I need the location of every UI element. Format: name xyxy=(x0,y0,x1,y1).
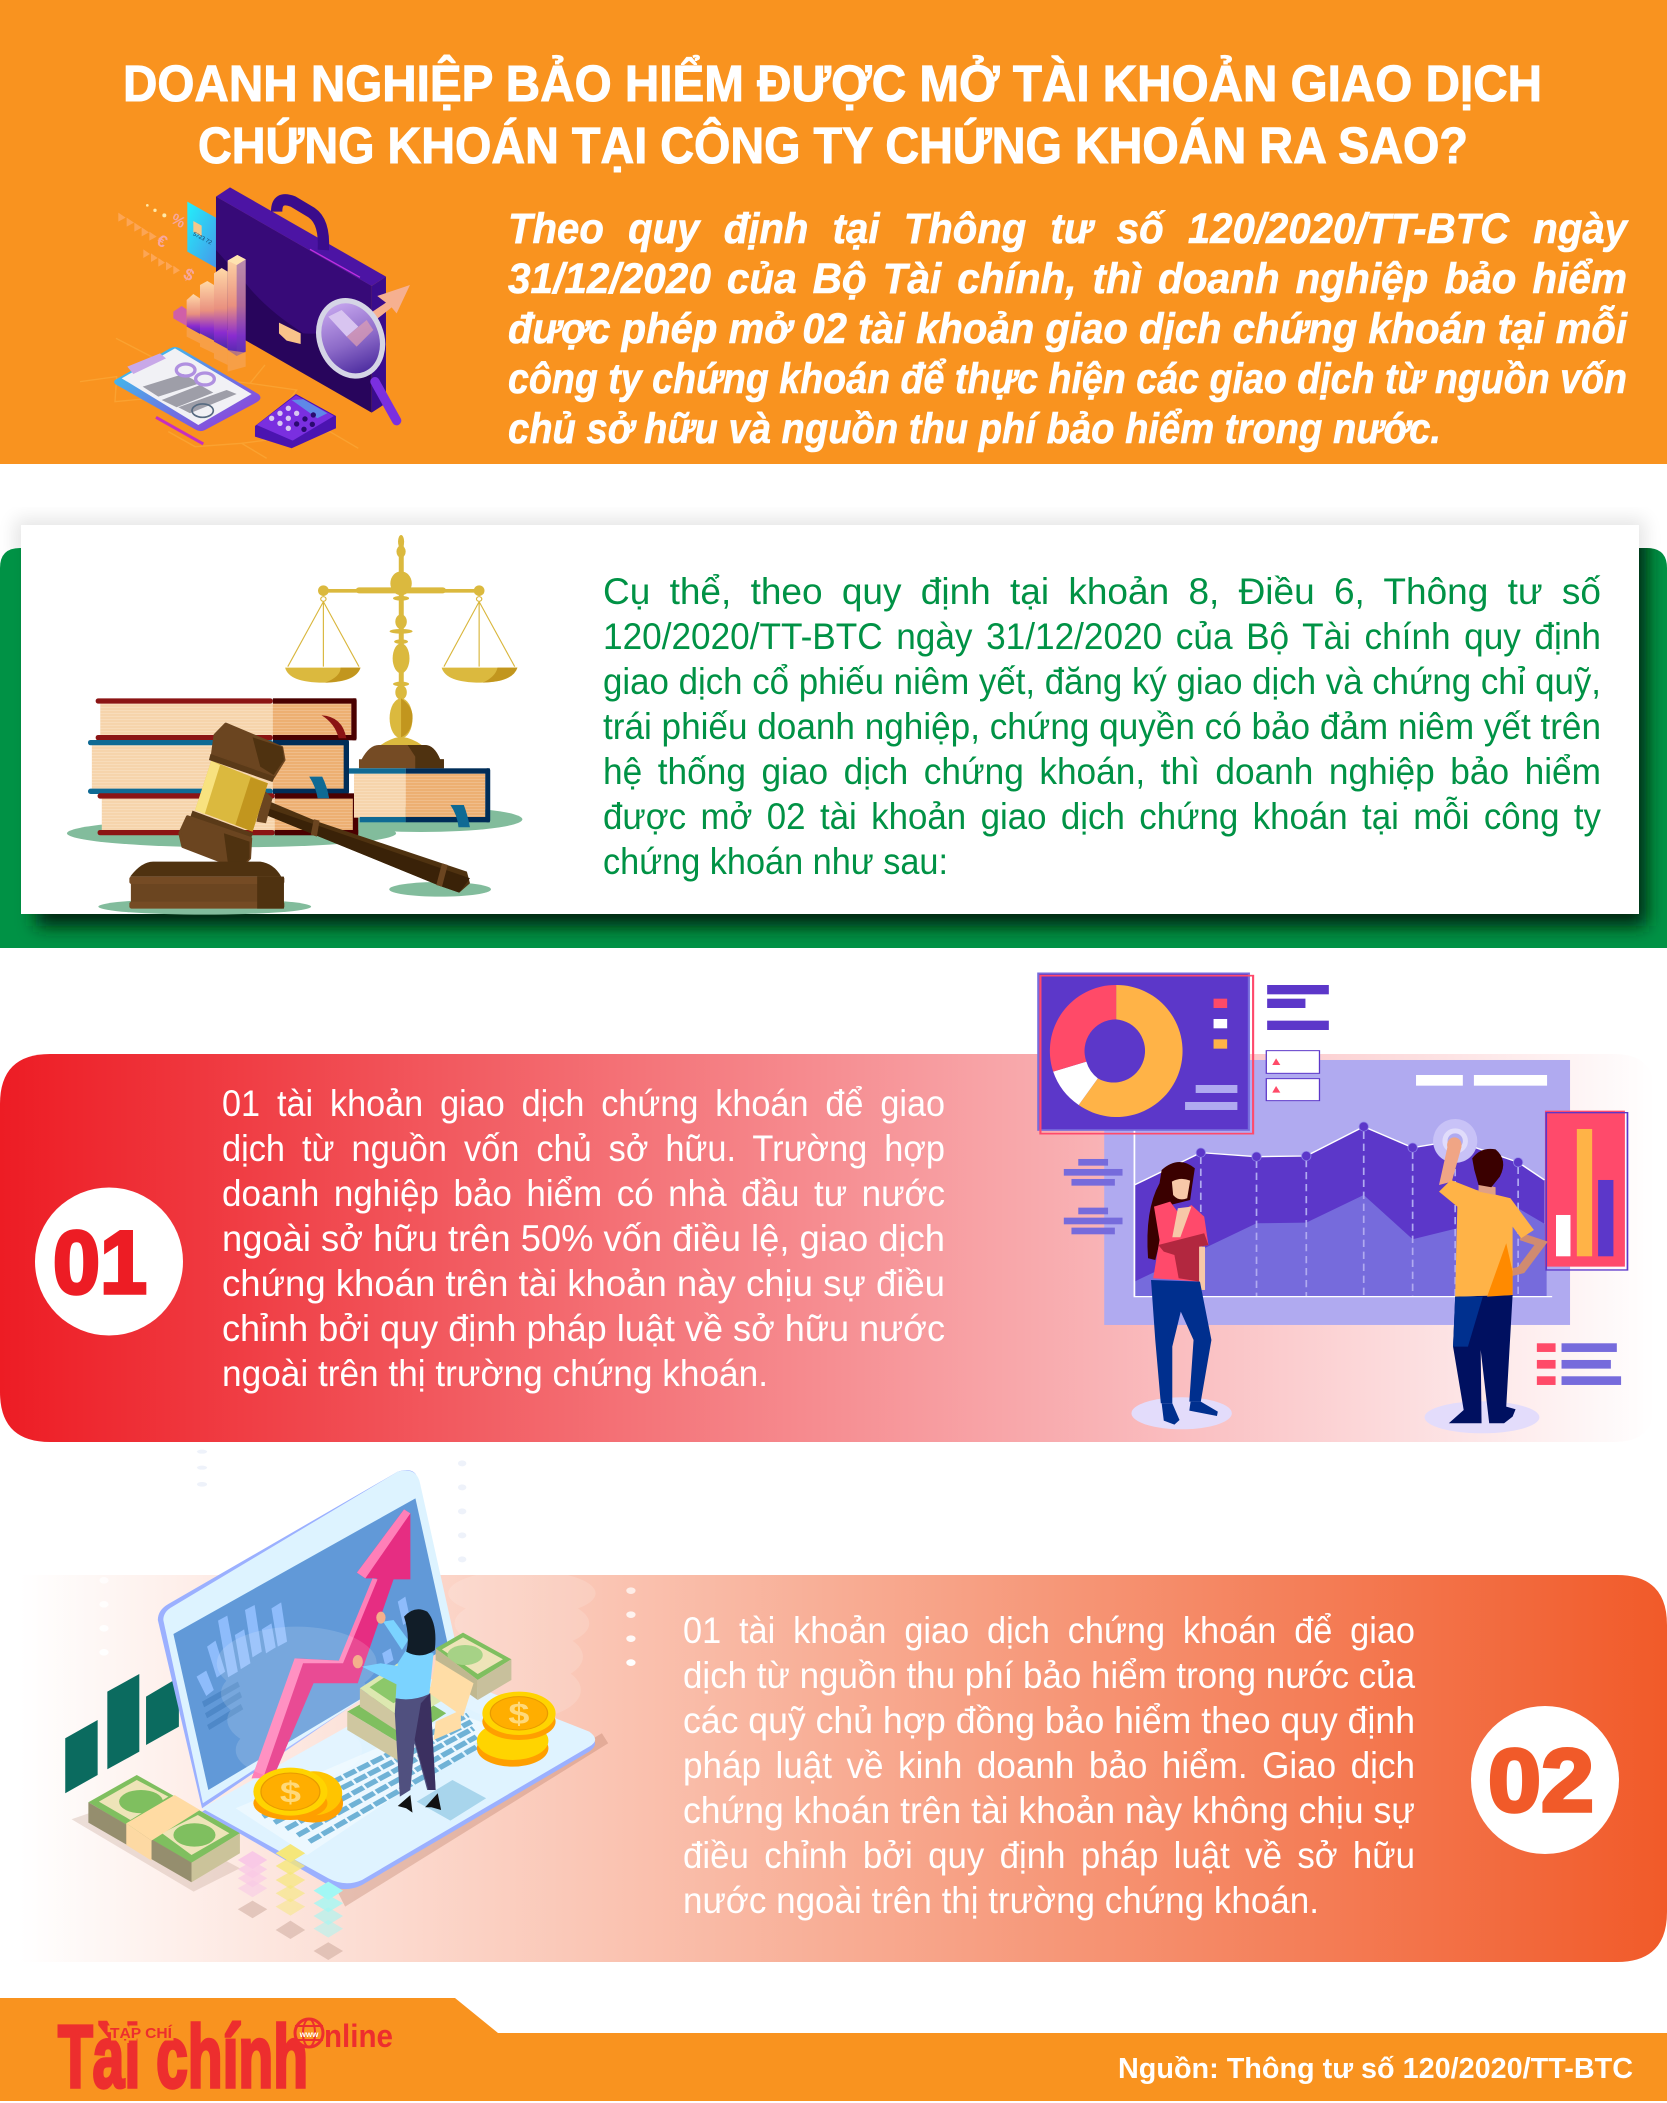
laptop xyxy=(158,1470,608,1907)
green side bars xyxy=(65,1674,179,1793)
clipboard xyxy=(114,347,260,431)
book stack xyxy=(88,698,490,835)
item 01 text: chứng khoán trên tài khoản này chịu sự điều xyxy=(222,1263,945,1304)
item 02 text: pháp luật về kinh doanh bảo hiểm. Giao dịch xyxy=(683,1745,1415,1786)
legal basis text: được mở 02 tài khoản giao dịch chứng khoán tại mỗi công ty xyxy=(603,796,1601,837)
illustration: briefcase, chart, magnifier, calculator: $ xyxy=(180,264,198,286)
icon: globe xyxy=(295,2019,323,2047)
badge 01 xyxy=(35,1188,183,1336)
illustration: briefcase, chart, magnifier, calculator: % xyxy=(168,211,188,232)
credit card xyxy=(187,202,220,270)
item 01 text: ngoài sở hữu trên 50% vốn điều lệ, giao dịch xyxy=(222,1218,945,1259)
note bars and alert boxes xyxy=(1064,985,1621,1385)
item 02 text xyxy=(683,1610,1415,1921)
item 01 text: ngoài trên thị trường chứng khoán. xyxy=(222,1353,768,1394)
cash stacks on laptop xyxy=(347,1633,511,1762)
bar chart card xyxy=(1545,1111,1627,1270)
legal basis text: giao dịch cổ phiếu niêm yết, đăng ký giao dịch và chứng chỉ quỹ, xyxy=(603,661,1601,702)
translucent coin swirl xyxy=(217,1570,596,1780)
illustration: briefcase, chart, magnifier, calculator: € xyxy=(153,231,171,252)
cash bundle xyxy=(72,1775,240,1892)
item 01 text: chỉnh bởi quy định pháp luật về sở hữu nước xyxy=(222,1308,945,1349)
gold coins: $ xyxy=(280,1776,301,1809)
item 02 text: chứng khoán trên tài khoản này không chịu sự xyxy=(683,1790,1415,1831)
donut chart card xyxy=(1038,973,1253,1134)
area chart xyxy=(1134,1122,1552,1297)
illustration: briefcase, chart, magnifier, calculator xyxy=(80,187,410,458)
footer band xyxy=(0,1998,1667,2103)
legal basis text: trái phiếu doanh nghiệp, chứng quyền có bảo đảm niêm yết trên xyxy=(603,706,1601,747)
growth bars xyxy=(173,255,246,372)
gold coins xyxy=(253,1692,556,1823)
legal basis text: hệ thống giao dịch chứng khoán, thì doanh nghiệp bảo hiểm xyxy=(603,751,1601,792)
credit card: 5723 72 xyxy=(192,231,213,246)
badge 02: 02 xyxy=(1488,1730,1594,1830)
icon: globe: www xyxy=(299,2030,319,2039)
item 01 text: dịch từ nguồn vốn chủ sở hữu. Trường hợp xyxy=(222,1128,945,1169)
logo: Tạp chí Tài chính Online: nline xyxy=(324,2018,393,2054)
magnifier and arrow xyxy=(308,285,410,421)
woman on laptop xyxy=(353,1609,441,1813)
item 02 text: nước ngoài trên thị trường chứng khoán. xyxy=(683,1880,1319,1921)
source: Nguồn: Thông tư số 120/2020/TT-BTC xyxy=(1118,2053,1633,2085)
figure: woman xyxy=(1131,1162,1232,1429)
gold coins: $ xyxy=(508,1698,530,1731)
intro paragraph xyxy=(508,205,1629,453)
item 02 text: điều chỉnh bởi quy định pháp luật về sở hữu xyxy=(683,1835,1415,1876)
item 01 text: 01 tài khoản giao dịch chứng khoán để giao xyxy=(222,1083,945,1124)
scales of justice xyxy=(285,535,517,768)
logo: Tạp chí Tài chính Online: TẠP CHÍ xyxy=(110,2025,173,2042)
calculator xyxy=(255,394,336,448)
intro paragraph: chủ sở hữu và nguồn thu phí bảo hiểm trong nước. xyxy=(508,405,1441,453)
badge 02 xyxy=(1471,1706,1619,1854)
figure: man xyxy=(1425,1119,1541,1433)
logo: Tạp chí Tài chính Online: TẠP CHÍ xyxy=(110,2025,173,2042)
illustration: scales, books and gavel xyxy=(67,535,522,915)
item 02 text: 01 tài khoản giao dịch chứng khoán để giao xyxy=(683,1610,1415,1651)
intro paragraph: 31/12/2020 của Bộ Tài chính, thì doanh nghiệp bảo hiểm xyxy=(508,255,1627,303)
title: DOANH NGHIỆP BẢO HIỂM ĐƯỢC MỞ TÀI KHOẢN GIAO DỊCH xyxy=(123,54,1542,112)
legal basis text xyxy=(603,571,1601,882)
panel: legal basis xyxy=(0,519,1667,948)
gavel xyxy=(129,724,470,909)
badge 01: 01 xyxy=(53,1212,147,1312)
item 01 text: doanh nghiệp bảo hiểm có nhà đầu tư nước xyxy=(222,1173,945,1214)
legal basis text: Cụ thể, theo quy định tại khoản 8, Điều 6, Thông tư số xyxy=(603,571,1601,612)
title xyxy=(123,54,1542,174)
briefcase xyxy=(216,187,386,413)
illustration: people analysing charts xyxy=(1038,973,1627,1433)
pixel diamonds xyxy=(238,1844,343,1960)
legal basis text: 120/2020/TT-BTC ngày 31/12/2020 của Bộ Tài chính quy định xyxy=(603,616,1601,657)
pencil xyxy=(156,417,203,444)
legal basis text: chứng khoán như sau: xyxy=(603,841,948,882)
item 01 text xyxy=(222,1083,945,1394)
illustration: laptop, rising arrow, coins and cash xyxy=(65,1450,636,1960)
rising pink arrow xyxy=(252,1509,410,1778)
panel: item 02 xyxy=(12,1450,1667,1962)
panel: item 01 xyxy=(0,973,1655,1442)
header band xyxy=(0,0,1667,464)
title: CHỨNG KHOÁN TẠI CÔNG TY CHỨNG KHOÁN RA SAO? xyxy=(198,116,1468,174)
item 02 text: dịch từ nguồn thu phí bảo hiểm trong nước của xyxy=(683,1655,1415,1696)
item 02 text: các quỹ chủ hợp đồng bảo hiểm theo quy định xyxy=(683,1700,1415,1741)
chart shadows and small arrows xyxy=(118,213,180,274)
